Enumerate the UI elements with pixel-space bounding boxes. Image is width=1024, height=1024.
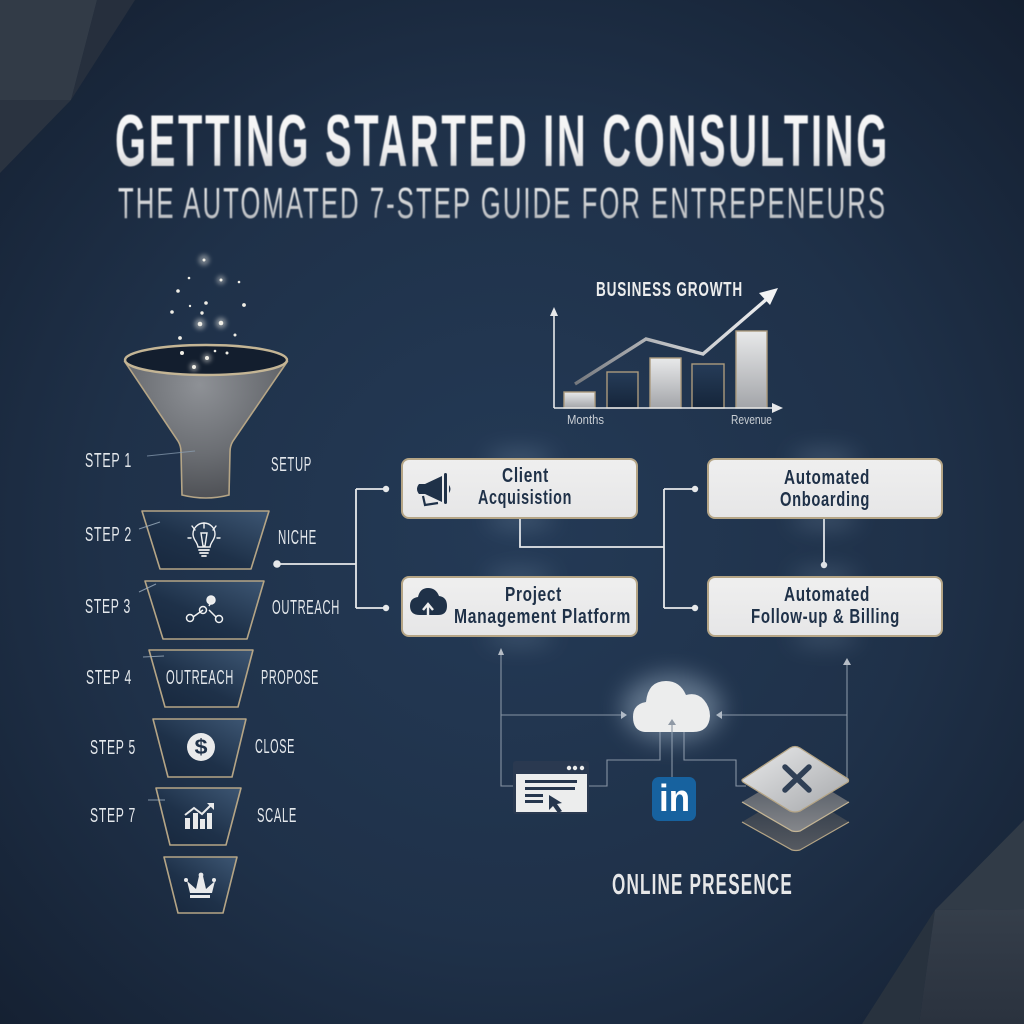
label: niche: NICHE	[278, 527, 317, 549]
card: client acquisition	[402, 459, 637, 518]
chart title: BUSINESS GROWTH	[596, 279, 743, 301]
label: step 2: STEP 2	[85, 524, 132, 546]
icon: stacked layers with x	[742, 746, 849, 850]
pointer	[139, 522, 160, 529]
label: step 7: STEP 7	[90, 805, 136, 827]
step 5 row	[90, 719, 295, 777]
funnel particles	[170, 254, 246, 340]
trapezoid: step 5	[153, 719, 246, 777]
funnel body	[125, 362, 287, 498]
label: step 4: STEP 4	[86, 667, 132, 689]
label: step 1: STEP 1	[85, 450, 132, 472]
final trapezoid with crown	[164, 857, 237, 913]
pointer	[148, 799, 165, 801]
icon: linkedin: in	[659, 778, 690, 820]
card: automated follow-up and billing: Follow-up & Billing	[751, 606, 900, 628]
x mark	[785, 767, 809, 790]
trapezoid: step 4	[149, 650, 253, 707]
axis label: revenue: Revenue	[731, 412, 772, 427]
card text: Automated	[784, 467, 870, 489]
trend line	[575, 298, 768, 384]
card: automated onboarding: Onboarding	[780, 489, 870, 511]
label: setup: SETUP	[271, 454, 312, 476]
icon: light bulb	[188, 523, 220, 556]
label: scale: SCALE	[257, 805, 297, 827]
pointer	[147, 451, 195, 456]
card glows	[486, 451, 859, 644]
label: close: CLOSE	[255, 736, 295, 758]
funnel graphic	[125, 254, 287, 498]
bars	[564, 331, 767, 408]
axes	[550, 307, 783, 413]
middle layer	[742, 770, 849, 832]
label: propose: PROPOSE	[261, 667, 319, 689]
icon: cloud	[622, 674, 722, 742]
label: outreach: OUTREACH	[272, 597, 340, 619]
icon: browser window	[513, 761, 589, 814]
bottom layer	[742, 790, 849, 850]
chart: business growth	[550, 279, 783, 427]
step 1 row	[85, 450, 312, 476]
card text: Client	[502, 465, 549, 487]
trapezoid label: outreach: OUTREACH	[166, 667, 234, 689]
corner shapes: top left	[0, 0, 135, 173]
card text: Project	[505, 584, 562, 606]
icon: growth bars	[185, 803, 214, 829]
card: project management platform: Management Platform	[454, 606, 631, 628]
trapezoid: step 7	[156, 788, 241, 845]
card: project management platform	[402, 577, 637, 636]
card: automated follow-up and billing	[708, 577, 942, 636]
icon: dollar coin: $	[194, 736, 208, 759]
card text: Automated	[784, 584, 870, 606]
corner shapes: bottom right	[862, 820, 1024, 1024]
icon: cloud upload	[410, 588, 447, 617]
icon: megaphone	[417, 473, 450, 505]
step 7 row	[90, 788, 297, 845]
particles inside rim	[180, 350, 228, 372]
icon: dollar coin	[187, 733, 215, 761]
pointer	[139, 584, 156, 592]
label: online presence: ONLINE PRESENCE	[612, 869, 793, 901]
label: step 5: STEP 5	[90, 737, 136, 759]
thin connectors to online presence	[498, 648, 851, 786]
connectors between steps and cards	[273, 486, 827, 611]
step 4 row	[86, 650, 319, 707]
pointer	[143, 656, 164, 657]
step 2 row	[85, 511, 317, 569]
trapezoid: step 3	[145, 581, 264, 639]
card: client acquisition: Acquisistion	[478, 487, 572, 509]
icon: crown	[184, 873, 216, 898]
trapezoid: step 2	[142, 511, 269, 569]
axis label: months: Months	[567, 412, 604, 427]
step 3 row	[85, 581, 340, 639]
label: step 3: STEP 3	[85, 596, 131, 618]
funnel rim	[125, 345, 287, 375]
card: automated onboarding	[708, 459, 942, 518]
icon: network nodes	[186, 596, 222, 622]
trend arrow head	[759, 288, 778, 305]
top layer	[742, 746, 848, 812]
